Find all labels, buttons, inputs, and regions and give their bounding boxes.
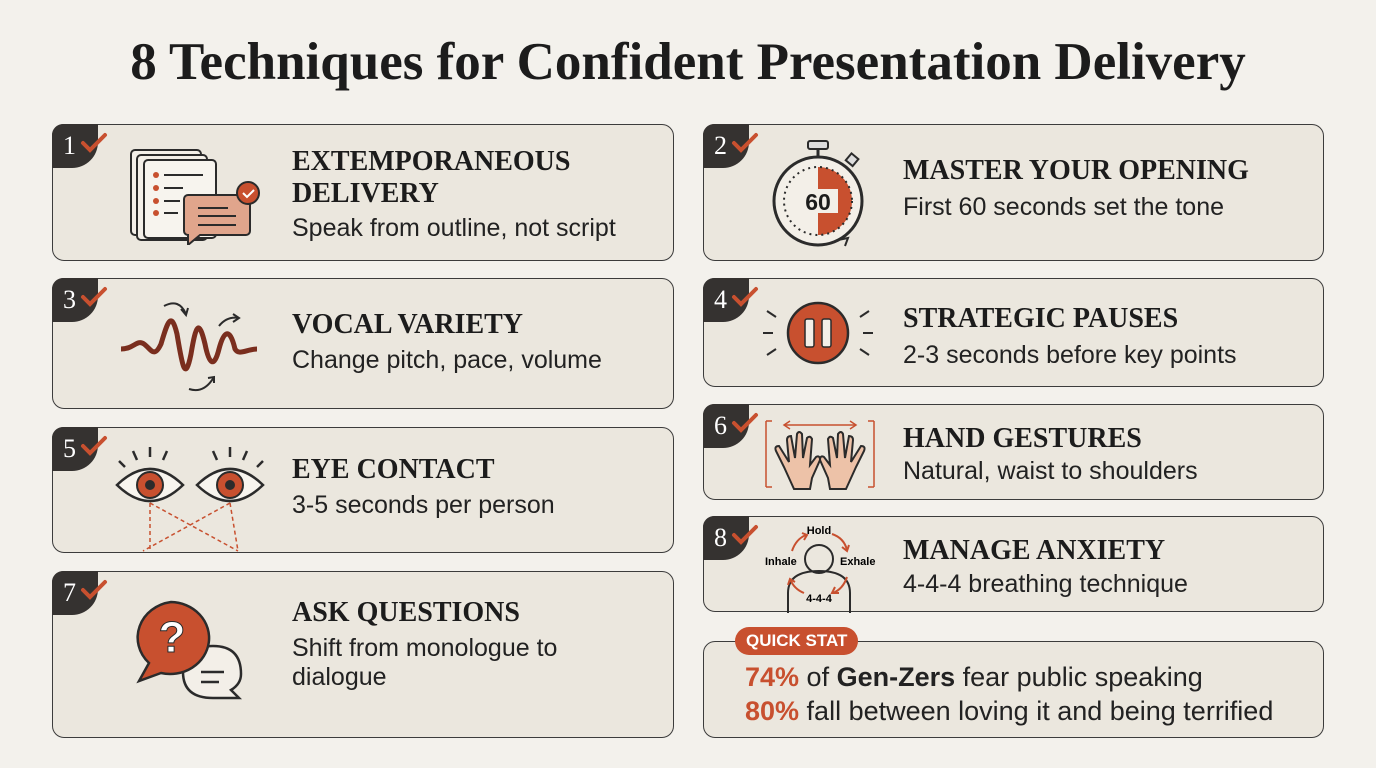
icon: stopwatch: 60: [805, 189, 831, 215]
badge 6: [703, 404, 749, 448]
badge 8: [703, 516, 749, 560]
heading 5: EYE CONTACT: [292, 454, 495, 485]
heading 3: VOCAL VARIETY: [292, 309, 523, 340]
subtitle 8: 4-4-4 breathing technique: [903, 570, 1188, 598]
heading 1: DELIVERY: [292, 178, 439, 209]
subtitle 7: dialogue: [292, 663, 387, 691]
icon: pause button: [763, 302, 873, 364]
subtitle 1: Speak from outline, not script: [292, 214, 616, 242]
panel: 6 gestures: [703, 404, 1324, 500]
panel: quick stat: [703, 641, 1324, 738]
badge 7: 7: [63, 578, 76, 607]
panel: 7 ask questions: [52, 571, 674, 738]
panel: 4 pauses: [703, 278, 1324, 387]
subtitle 3: Change pitch, pace, volume: [292, 346, 602, 374]
tag: quick stat: [735, 627, 858, 655]
panel: 1 extemporaneous: [52, 124, 674, 261]
icon: hands: [765, 420, 875, 490]
heading 4: STRATEGIC PAUSES: [903, 303, 1178, 334]
title: 8 Techniques for Confident Presentation Delivery: [130, 33, 1246, 91]
badge 1: 1: [63, 131, 76, 160]
stat lines: 74% of Gen-Zers fear public speaking: [745, 662, 1203, 692]
badge 6: 6: [714, 411, 727, 440]
heading 8: MANAGE ANXIETY: [903, 535, 1165, 566]
heading 7: ASK QUESTIONS: [292, 597, 520, 628]
badge 5: [52, 427, 98, 471]
icon: breathing: 4-4-4: [806, 593, 833, 605]
subtitle 5: 3-5 seconds per person: [292, 491, 555, 519]
icon: breathing: Exhale: [840, 556, 875, 568]
badge 7: [52, 571, 98, 615]
icon: question bubbles: ?: [159, 613, 185, 662]
subtitle 7: [292, 634, 557, 691]
tag: quick stat: QUICK STAT: [746, 631, 847, 650]
subtitle 4: 2-3 seconds before key points: [903, 341, 1237, 369]
badge 4: 4: [714, 285, 727, 314]
subtitle 2: First 60 seconds set the tone: [903, 193, 1224, 221]
icon: breathing: Inhale: [765, 556, 797, 568]
icon: breathing: [765, 525, 876, 613]
stat lines: [745, 662, 1273, 726]
badge 3: 3: [63, 285, 76, 314]
subtitle 7: Shift from monologue to: [292, 634, 557, 662]
badge 4: [703, 278, 749, 322]
panel: 5 eye contact: [52, 427, 674, 553]
badge 2: 2: [714, 131, 727, 160]
heading 6: HAND GESTURES: [903, 423, 1142, 454]
badge 5: 5: [63, 434, 76, 463]
badge 3: [52, 278, 98, 322]
icon: sound wave: [121, 302, 257, 392]
icon: breathing: Hold: [807, 525, 831, 537]
icon: eyes: [115, 447, 265, 552]
icon: notes and speech bubble: [130, 149, 260, 245]
badge 1: [52, 124, 98, 168]
panel: 3 vocal variety: [52, 278, 674, 409]
stat lines: 80% fall between loving it and being terrified: [745, 696, 1273, 726]
subtitle 6: Natural, waist to shoulders: [903, 457, 1198, 485]
heading 2: MASTER YOUR OPENING: [903, 155, 1249, 186]
badge 2: [703, 124, 749, 168]
badge 8: 8: [714, 523, 727, 552]
heading 1: EXTEMPORANEOUS: [292, 146, 570, 177]
icon: stopwatch: [772, 140, 864, 246]
icon: question bubbles: [136, 600, 242, 700]
panel: 2 opening: [703, 124, 1324, 261]
heading 1: [292, 146, 570, 209]
panel: 8 anxiety: [703, 516, 1324, 612]
